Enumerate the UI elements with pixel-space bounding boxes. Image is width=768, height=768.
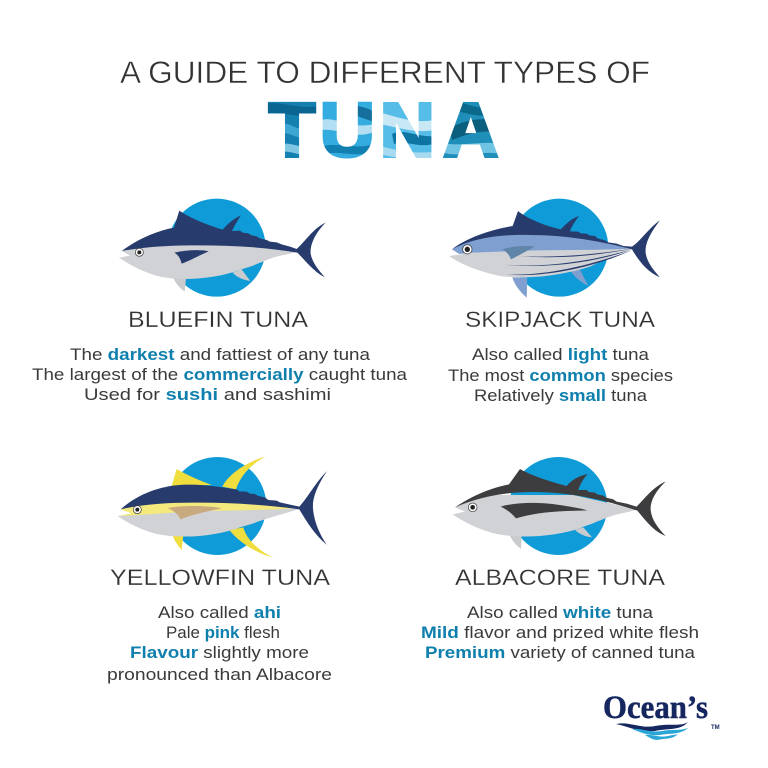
text block: yellowfin facts: Pale pink flesh [166, 624, 280, 642]
text block: bluefin facts: Used for sushi and sashimi [84, 386, 331, 404]
logo: Ocean's: Ocean’s [603, 690, 708, 726]
heading: skipjack tuna: SKIPJACK TUNA [465, 307, 655, 332]
heading: yellowfin tuna: YELLOWFIN TUNA [110, 565, 330, 590]
text block: bluefin facts [32, 346, 407, 404]
logo: Ocean's: TM [711, 725, 720, 731]
text block: yellowfin facts: pronounced than Albacore [107, 666, 332, 684]
text block: albacore facts [421, 604, 699, 662]
text block: bluefin facts: The darkest and fattiest of any tuna [70, 346, 370, 364]
text block: skipjack facts: Also called light tuna [472, 346, 649, 364]
icon: bluefin tuna [119, 199, 326, 297]
title word: TUNA: TUNA [268, 88, 499, 174]
text block: skipjack facts [448, 346, 673, 405]
icon: yellowfin tuna [118, 456, 327, 558]
heading: bluefin tuna: BLUEFIN TUNA [128, 307, 308, 332]
text block: albacore facts: Mild flavor and prized white flesh [421, 624, 699, 642]
text block: yellowfin facts [107, 604, 332, 684]
text block: yellowfin facts: Flavour slightly more [130, 644, 309, 662]
heading: albacore tuna: ALBACORE TUNA [455, 565, 665, 590]
title: A GUIDE TO DIFFERENT TYPES OF [120, 54, 650, 90]
text block: skipjack facts: Relatively small tuna [474, 387, 647, 405]
text block: albacore facts: Premium variety of canned tuna [425, 644, 695, 662]
icon: skipjack tuna [449, 199, 660, 298]
logo: Ocean's [603, 690, 720, 740]
icon: albacore tuna [453, 457, 666, 555]
text block: yellowfin facts: Also called ahi [158, 604, 281, 622]
text block: bluefin facts: The largest of the commercially caught tuna [32, 366, 407, 384]
text block: albacore facts: Also called white tuna [467, 604, 653, 622]
text block: skipjack facts: The most common species [448, 367, 673, 385]
